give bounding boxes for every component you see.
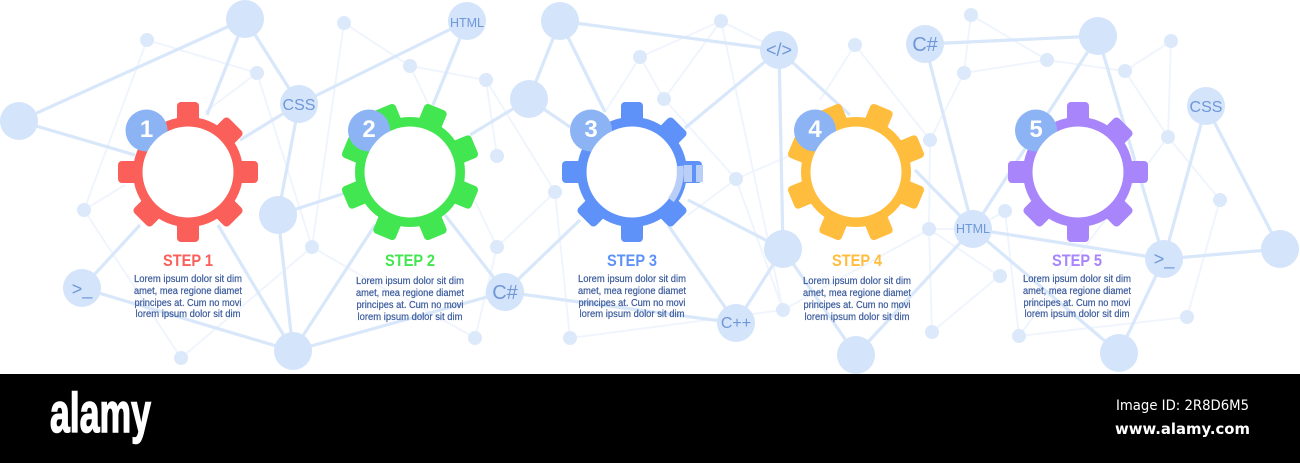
- badge 3: 3: [584, 116, 598, 143]
- step 2 text: Lorem ipsum dolor sit dim: [356, 276, 464, 287]
- badge 3: [570, 110, 612, 152]
- website: www.alamy.com: [1115, 420, 1250, 438]
- step 4 gear: [765, 81, 947, 263]
- step 4 text: lorem ipsum dolor sit dim: [804, 312, 910, 323]
- node labels: code terms: C#: [912, 34, 939, 56]
- badge 4: 4: [808, 116, 822, 143]
- step 2 gear: [319, 81, 501, 263]
- step 3 text: Lorem ipsum dolor sit dim: [578, 274, 686, 285]
- step 2 title: STEP 2: [385, 252, 435, 270]
- step 5 text: lorem ipsum dolor sit dim: [1024, 309, 1130, 320]
- node labels: code terms: >_: [72, 279, 93, 300]
- node labels: code terms: C++: [721, 315, 751, 332]
- node labels: code terms: [72, 16, 1222, 332]
- step 2 text: principes at. Cum no movi: [356, 300, 464, 311]
- step 2 text: lorem ipsum dolor sit dim: [358, 312, 462, 323]
- step 3 text: amet, mea regione diamet: [578, 286, 686, 297]
- node labels: code terms: HTML: [450, 16, 484, 30]
- alamy logo: alamy: [50, 381, 151, 444]
- step 3 title: STEP 3: [607, 252, 657, 270]
- step 5 text: amet, mea regione diamet: [1023, 286, 1131, 297]
- step 4 text: Lorem ipsum dolor sit dim: [803, 276, 911, 287]
- network background: thick links: [19, 19, 1280, 355]
- step 5 text: principes at. Cum no movi: [1024, 298, 1130, 309]
- step 4 title: STEP 4: [832, 252, 883, 270]
- node labels: code terms: HTML: [956, 222, 990, 236]
- step 1 text: lorem ipsum dolor sit dim: [136, 309, 240, 320]
- step 4 text: amet, mea regione diamet: [803, 288, 911, 299]
- step 1 text: principes at. Cum no movi: [134, 298, 242, 309]
- step 3 text: [578, 274, 686, 320]
- footer band: [0, 374, 1300, 463]
- step 5 title: STEP 5: [1052, 252, 1102, 270]
- node labels: code terms: C#: [492, 282, 519, 304]
- node labels: code terms: CSS: [283, 97, 315, 114]
- step 4 text: principes at. Cum no movi: [804, 300, 910, 311]
- step 1 text: [134, 274, 242, 320]
- step 5 text: [1023, 274, 1131, 320]
- step 3 text: principes at. Cum no movi: [578, 298, 686, 309]
- step 3 gear: [562, 102, 703, 242]
- step 3 text: lorem ipsum dolor sit dim: [580, 309, 684, 320]
- step 2 text: amet, mea regione diamet: [356, 288, 464, 299]
- step 5 text: Lorem ipsum dolor sit dim: [1023, 274, 1131, 285]
- node labels: code terms: CSS: [1190, 99, 1222, 116]
- badge 4: [794, 110, 836, 152]
- step 2 text: [356, 276, 464, 323]
- node labels: code terms: >_: [1154, 249, 1175, 270]
- step 1 gear: [118, 102, 258, 242]
- badge 5: 5: [1029, 116, 1043, 143]
- node labels: code terms: </>: [766, 40, 792, 60]
- badge 2: [348, 110, 390, 152]
- step 4 text: [803, 276, 911, 323]
- step 1 text: amet, mea regione diamet: [134, 286, 242, 297]
- step 1 text: Lorem ipsum dolor sit dim: [134, 274, 242, 285]
- step 1 title: STEP 1: [163, 252, 213, 270]
- network background: thin links: [84, 15, 1220, 358]
- step 5 gear: [1008, 102, 1148, 242]
- badge 1: 1: [140, 116, 153, 143]
- badge 2: 2: [362, 116, 376, 143]
- network background: small nodes: [77, 8, 1227, 365]
- image id: Image ID: 2R8D6M5: [1116, 398, 1249, 414]
